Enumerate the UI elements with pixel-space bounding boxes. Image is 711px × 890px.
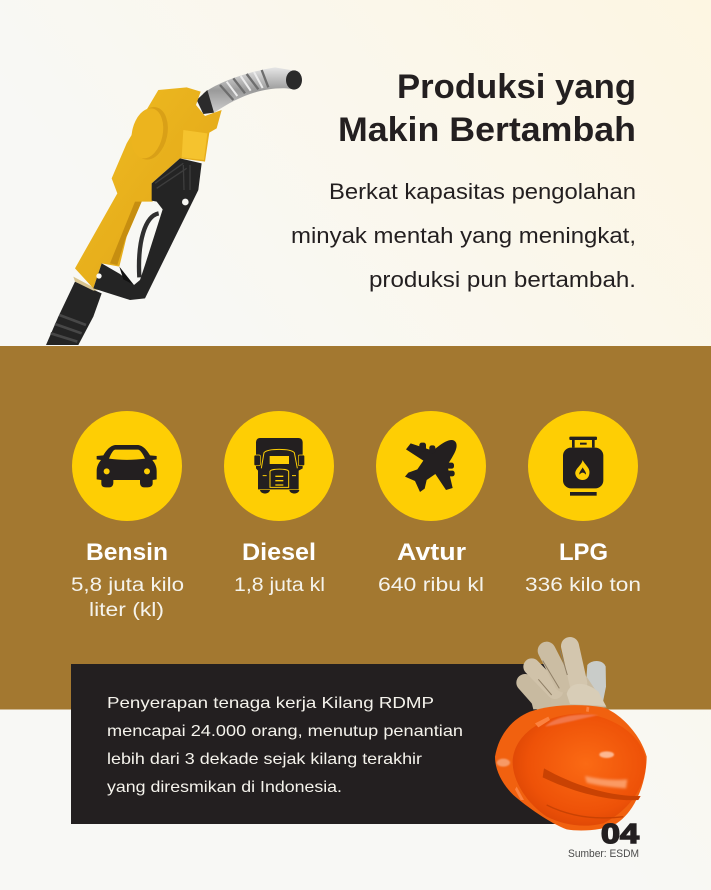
intro text: produksi pun bertambah. xyxy=(369,267,636,292)
title: Makin Bertambah xyxy=(338,111,636,149)
value: Bensin: liter (kl) xyxy=(89,600,164,621)
label: Diesel: Diesel xyxy=(242,539,316,566)
source: Sumber: ESDM xyxy=(568,848,639,860)
intro text: Berkat kapasitas pengolahan xyxy=(329,179,636,204)
item: Avtur xyxy=(376,411,486,596)
icon: airplane xyxy=(376,411,486,521)
label: Avtur: Avtur xyxy=(397,539,466,566)
illustration: fuel nozzle xyxy=(46,67,302,345)
value: Bensin: 5,8 juta kilo xyxy=(71,575,184,596)
page number: 04 xyxy=(601,818,640,849)
item: LPG xyxy=(525,411,641,596)
callout text: mencapai 24.000 orang, menutup penantian xyxy=(107,723,463,740)
brown band panel xyxy=(0,346,711,710)
item: Bensin xyxy=(71,411,184,621)
value: Diesel: 1,8 juta kl xyxy=(234,575,325,596)
title: Produksi yang xyxy=(397,68,636,106)
label: LPG: LPG xyxy=(559,539,608,566)
item: Diesel xyxy=(224,411,334,596)
value: Bensin xyxy=(71,575,184,621)
hard hat brim xyxy=(495,705,647,830)
icon: car xyxy=(72,411,182,521)
icon: gas cylinder xyxy=(528,411,638,521)
title xyxy=(338,68,636,149)
value: LPG: 336 kilo ton xyxy=(525,575,641,596)
gloves xyxy=(525,646,607,709)
callout text: yang diresmikan di Indonesia. xyxy=(107,779,342,796)
callout text: Penyerapan tenaga kerja Kilang RDMP xyxy=(107,695,434,712)
callout text: lebih dari 3 dekade sejak kilang terakhir xyxy=(107,751,423,768)
hard hat dome xyxy=(513,713,646,826)
value: Avtur: 640 ribu kl xyxy=(378,575,484,596)
callout text xyxy=(107,695,463,796)
intro text: minyak mentah yang meningkat, xyxy=(291,223,636,248)
icon: truck xyxy=(224,411,334,521)
illustration: gloves and hard hat xyxy=(495,646,647,830)
intro text xyxy=(291,179,636,292)
label: Bensin: Bensin xyxy=(86,539,168,566)
dark callout panel xyxy=(71,664,561,824)
